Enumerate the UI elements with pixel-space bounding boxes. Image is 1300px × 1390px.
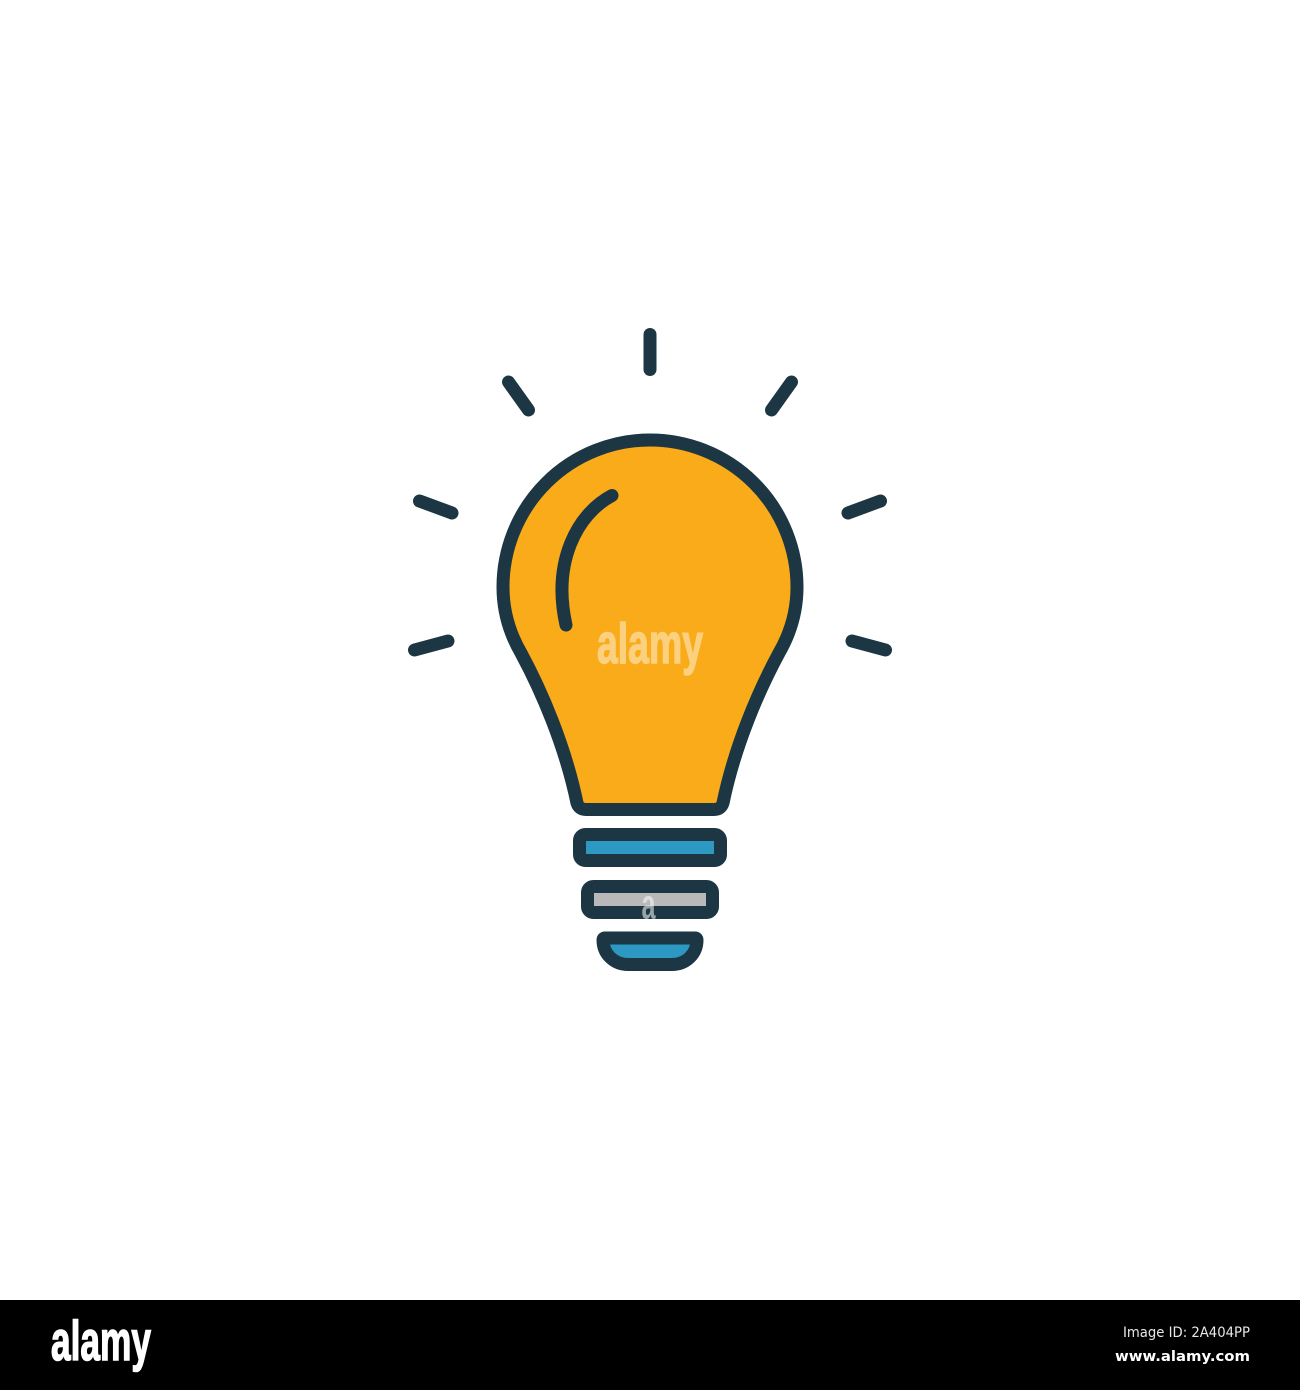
icon: upper base ring [580,834,720,860]
icon: middle base ring [588,886,712,912]
icon: bulb glass [503,440,797,810]
footer image id: Image ID: 2A404PP [1123,1325,1250,1341]
icon: glass highlight [562,496,612,625]
watermark: small letter on base: a [642,880,656,928]
icon: light rays [414,334,886,650]
footer logo: alamy [51,1309,151,1372]
icon: bulb tip [603,938,697,964]
watermark: alamy on bulb: alamy [597,612,703,676]
footer url: www.alamy.com [1115,1348,1250,1365]
footer bar [0,1300,1300,1390]
